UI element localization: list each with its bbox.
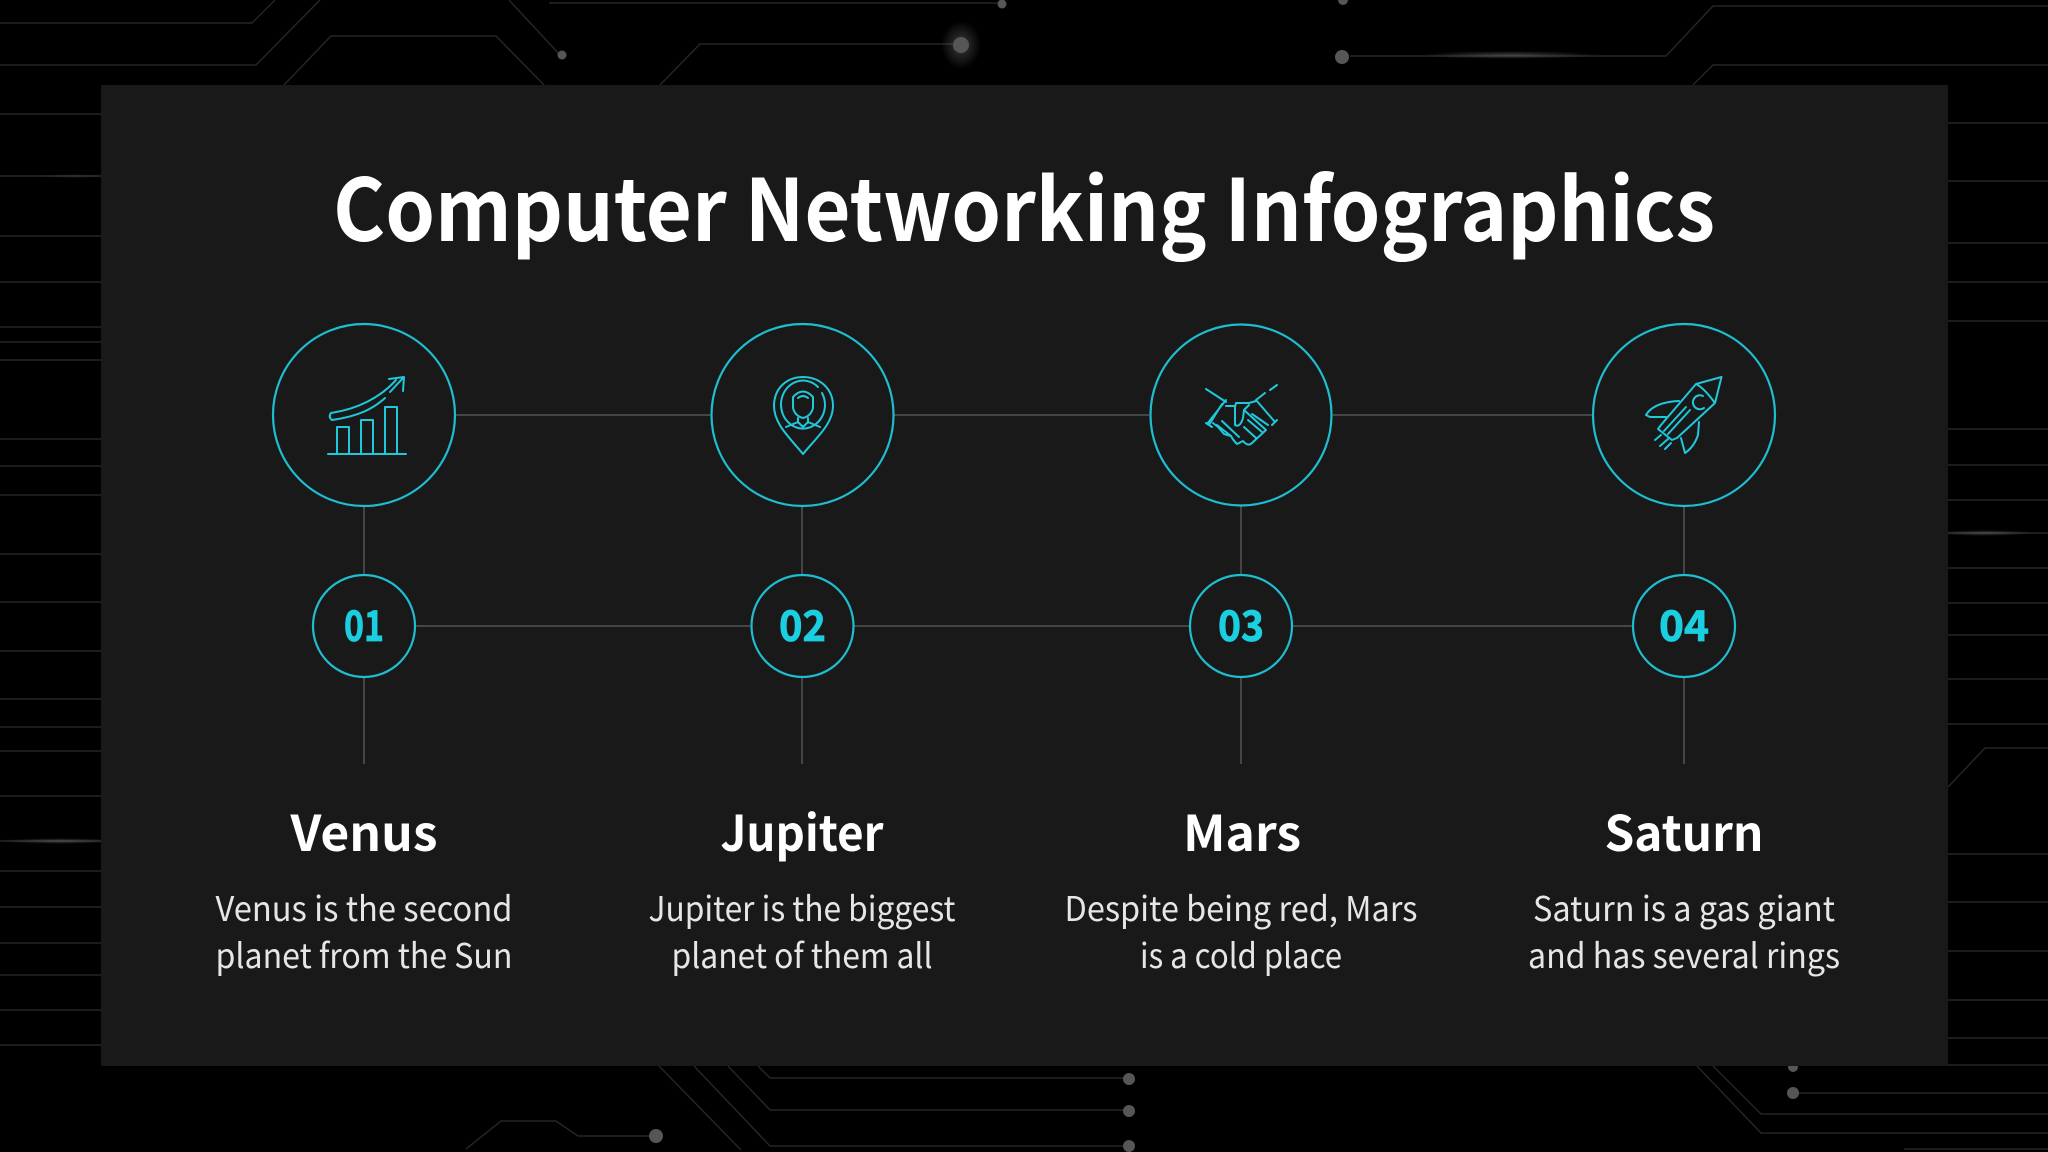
description: Venus: Venus is the second	[216, 882, 512, 931]
description: Mars: is a cold place	[1140, 929, 1342, 978]
number badge 03: 03	[1218, 593, 1264, 654]
icon: location pin with person	[712, 324, 894, 506]
icon: handshake	[1150, 324, 1332, 506]
number badge 04	[1633, 575, 1735, 677]
icon: rocket	[1593, 324, 1775, 506]
title: Computer Networking Infographics	[333, 141, 1715, 266]
description: Jupiter	[648, 882, 956, 978]
connector lines	[364, 415, 1684, 764]
column: Saturn	[1528, 324, 1840, 978]
description: Venus: planet from the Sun	[216, 929, 512, 978]
number badge 02: 02	[779, 593, 826, 654]
description: Mars: Despite being red, Mars	[1064, 882, 1418, 931]
heading: Jupiter: Jupiter	[720, 795, 884, 866]
heading: Saturn: Saturn	[1604, 795, 1764, 866]
column: Jupiter	[648, 324, 956, 978]
number badge 03	[1190, 575, 1292, 677]
number badge 01	[313, 575, 415, 677]
heading: Mars: Mars	[1183, 795, 1301, 866]
number badge 01: 01	[344, 593, 384, 654]
description: Jupiter: planet of them all	[672, 929, 932, 978]
heading: Venus: Venus	[289, 795, 438, 866]
column: Venus	[216, 324, 512, 978]
number badge 02	[752, 575, 854, 677]
description: Mars	[1064, 882, 1418, 978]
description: Jupiter: Jupiter is the biggest	[648, 882, 956, 931]
description: Venus	[216, 882, 512, 978]
number badge 04: 04	[1659, 593, 1709, 654]
description: Saturn	[1528, 882, 1840, 978]
description: Saturn: and has several rings	[1528, 929, 1840, 978]
icon: rising bar chart	[273, 324, 455, 506]
panel: main dark card	[101, 85, 1948, 1066]
column: Mars	[1064, 324, 1418, 978]
description: Saturn: Saturn is a gas giant	[1533, 882, 1835, 931]
